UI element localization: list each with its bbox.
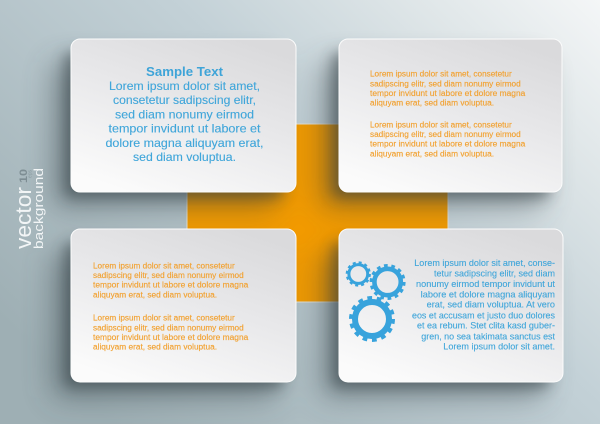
text block: bottom right blue text: eos et accusam et justo duo dolores [412,310,555,320]
text block: top right orange text: sadipscing elitr, sed diam nonumy eirmod [370,130,521,139]
vertical watermark: vector background: 10 [18,169,30,183]
text block: sample body [106,79,264,164]
text block: top right orange text: tempor invidunt ut labore et dolore magna [370,140,526,149]
vertical watermark: vector background [11,168,46,249]
text block: top right orange text: sadipscing elitr, sed diam nonumy eirmod [370,79,521,88]
text block: bottom right blue text: et ea rebum. Stet clita kasd guber- [417,321,555,331]
heading: sample text: Sample Text [146,64,224,79]
text block: top right orange text: Lorem ipsum dolor sit amet, consetetur [370,70,512,79]
text block: bottom right blue text [412,258,555,352]
panel: top right card [339,39,562,192]
vertical watermark: vector background: vector [11,187,36,249]
text block: bottom left orange text: sadipscing elitr, sed diam nonumy eirmod [93,323,244,332]
text block: top right orange text: Lorem ipsum dolor sit amet, consetetur [370,120,512,129]
vertical watermark: vector background: background [31,168,46,249]
text block: bottom left orange text [93,261,249,352]
text block: bottom right blue text: Lorem ipsum dolor sit amet. [443,342,555,352]
text block: bottom right blue text: labore et dolore magna aliquyam [421,289,555,299]
text block: top right orange text [370,70,526,158]
text block: sample body: tempor invidunt ut labore et [108,122,261,136]
text block: bottom left orange text: tempor invidunt ut labore et dolore magna [93,333,249,342]
text block: bottom left orange text: aliquyam erat, sed diam voluptua. [93,343,217,352]
text block: bottom left orange text: aliquyam erat, sed diam voluptua. [93,290,217,299]
vertical watermark: vector background: eps [28,169,34,178]
orange cross panel [187,124,448,302]
text block: bottom left orange text: Lorem ipsum dolor sit amet, consetetur [93,261,235,270]
text block: sample body: consetetur sadipscing elitr, [113,93,256,107]
text block: bottom right blue text: erat, sed diam voluptua. At vero [427,300,555,310]
text block: top right orange text: aliquyam erat, sed diam voluptua. [370,149,494,158]
text block: bottom left orange text: tempor invidunt ut labore et dolore magna [93,281,249,290]
text block: top right orange text: aliquyam erat, sed diam voluptua. [370,99,494,108]
text block: sample body: dolore magna aliquyam erat, [106,136,264,150]
text block: sample body: Lorem ipsum dolor sit amet, [109,79,260,93]
text block: bottom right blue text: tetur sadipscing elitr, sed diam [434,268,555,278]
text block: bottom left orange text: sadipscing elitr, sed diam nonumy eirmod [93,271,244,280]
icon: gears [347,263,404,340]
text block: sample body: sed diam voluptua. [133,150,236,164]
wide card shadows [52,62,544,398]
text block: bottom right blue text: nonumy eirmod tempor invidunt ut [416,279,555,289]
panel: sample text card [71,39,296,192]
text block: bottom right blue text: gren, no sea takimata sanctus est [421,331,555,341]
panel: bottom right card [339,229,563,382]
text block: bottom right blue text: Lorem ipsum dolor sit amet, conse- [414,258,555,268]
tight card shadows [64,52,550,388]
text block: top right orange text: tempor invidunt ut labore et dolore magna [370,89,526,98]
text block: sample body: sed diam nonumy eirmod [115,108,254,122]
panel: bottom left card [71,229,296,382]
text block: bottom left orange text: Lorem ipsum dolor sit amet, consetetur [93,314,235,323]
